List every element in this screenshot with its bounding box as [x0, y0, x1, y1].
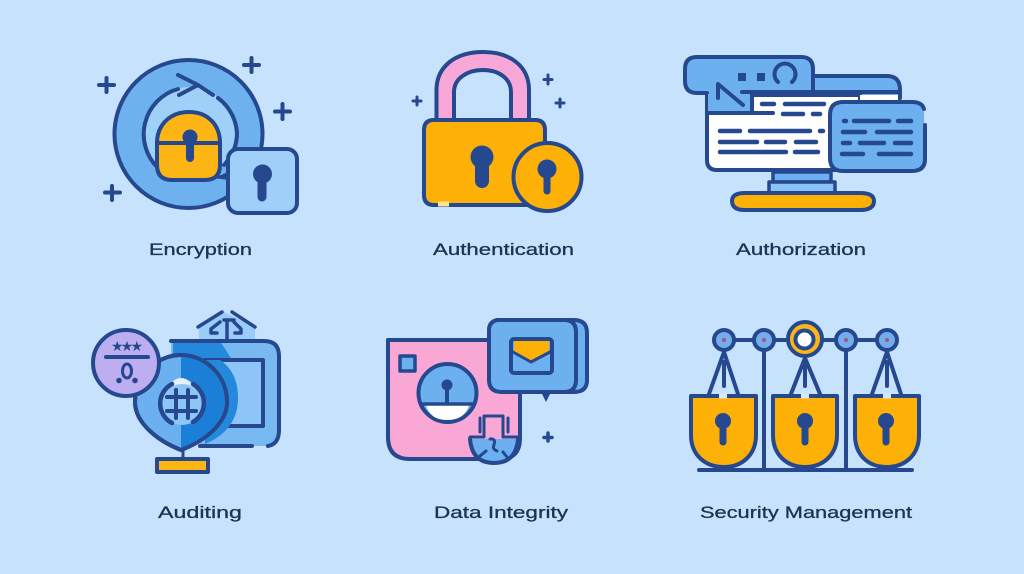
icon: pink card with gauge keyhole — [388, 340, 520, 459]
text lines: overlay window — [842, 121, 911, 154]
icon: sparkle plus signs — [413, 75, 564, 107]
icon: message bubble with envelope — [489, 320, 587, 402]
label: Data Integrity: Data Integrity — [434, 504, 569, 522]
panel: auditing — [93, 312, 279, 522]
panel: authorization — [685, 57, 925, 259]
icon: pink padlock with key circle — [424, 52, 582, 211]
label: Encryption: Encryption — [149, 241, 252, 259]
label: Authorization: Authorization — [736, 241, 866, 259]
panel: security management — [691, 322, 919, 522]
panel: data integrity — [388, 320, 587, 522]
icon: left shield lock — [691, 352, 756, 467]
label: Authentication: Authentication — [433, 241, 574, 259]
panel: authentication — [413, 52, 582, 259]
icon: document frame with shield — [135, 341, 279, 458]
icon: sparkle plus signs — [99, 58, 290, 200]
label: Auditing: Auditing — [158, 504, 242, 522]
icon: encryption ring with padlock — [114, 60, 297, 213]
icon: sparkle plus sign — [544, 433, 552, 441]
icon: network nodes — [714, 322, 897, 356]
icon: right shield lock — [855, 352, 919, 467]
icon: broken seal — [470, 416, 520, 463]
icon: star rating badge — [93, 330, 159, 396]
icon: center shield lock — [773, 358, 837, 467]
label: Security Management: Security Management — [700, 504, 913, 522]
icon: house network roof — [198, 312, 255, 344]
text lines: main window — [720, 104, 824, 152]
icon: star rating badge: ★★★ — [111, 338, 143, 354]
icon: connector rail and posts — [699, 340, 912, 470]
icon: computer monitor with windows — [685, 57, 925, 210]
panel: encryption — [99, 58, 297, 259]
icon: yellow base — [157, 459, 208, 472]
